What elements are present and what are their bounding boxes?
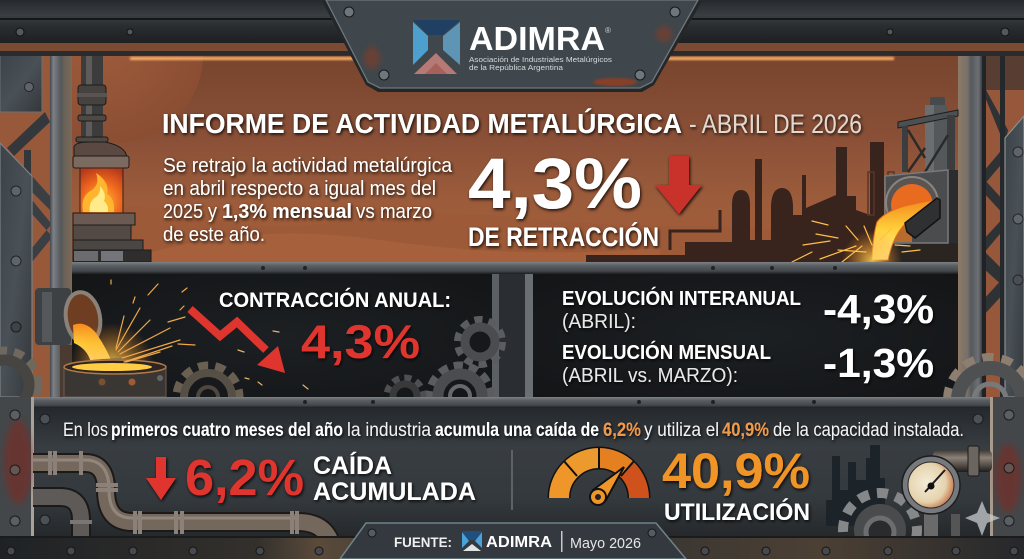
horizontal beam: middle top <box>72 262 958 274</box>
logo: ADIMRA emblem <box>413 20 460 74</box>
label: contraccion anual: 4,3% <box>301 315 420 368</box>
text: accumulated summary sentence: En los <box>63 420 108 441</box>
plate: header logo backing <box>322 0 702 92</box>
text: accumulated summary sentence: la industria <box>347 420 431 441</box>
desert dunes <box>72 206 958 262</box>
stat: 40,9% utilizacion <box>662 443 810 526</box>
gears: contraction panel <box>0 320 502 428</box>
text block: summary: 2025 y <box>163 201 217 223</box>
stat row: mensual <box>562 340 934 387</box>
big number: 4,3% retraction: 4,3% <box>468 145 642 224</box>
stat row: mensual: -1,3% <box>823 340 934 386</box>
glowing light strips <box>130 57 894 60</box>
panel: hero desert scene <box>0 0 1024 270</box>
text: accumulated summary sentence: 6,2% <box>603 420 641 441</box>
stat row: mensual: (ABRIL vs. MARZO): <box>562 365 738 387</box>
icon: pipe pouring molten metal <box>35 288 166 407</box>
planet <box>27 0 203 143</box>
logo: ADIMRA wordmark: ADIMRA <box>469 20 605 57</box>
title: - ABRIL DE 2026 <box>689 109 862 139</box>
text block: summary: en abril respecto a igual mes del <box>163 178 436 200</box>
text block: summary: vs marzo <box>356 201 432 223</box>
illustration: bottom factory silhouette <box>826 445 885 526</box>
stat row: interanual: (ABRIL): <box>562 311 636 333</box>
text block: summary: de este año. <box>163 224 265 246</box>
logo: ADIMRA wordmark: Asociación de Industriales Metalúrgicos <box>469 55 612 64</box>
icon: furnace with flame <box>73 52 151 262</box>
logo: ADIMRA wordmark: de la República Argentina <box>469 63 564 72</box>
frame: top bar <box>0 0 1024 56</box>
logo: ADIMRA wordmark: ® <box>605 26 611 35</box>
stat row: mensual: EVOLUCIÓN MENSUAL <box>562 340 771 364</box>
icon: falling trend arrow <box>190 309 285 373</box>
gear: right middle <box>948 358 1024 442</box>
stat: 6,2% caida acumulada: ACUMULADA <box>313 478 476 506</box>
illustration: factory silhouette <box>586 142 894 262</box>
text: accumulated summary sentence: acumula una caída de <box>435 420 599 441</box>
stat row: interanual: EVOLUCIÓN INTERANUAL <box>562 286 801 310</box>
frame: right column <box>958 50 1024 400</box>
panel: contraction <box>72 274 525 397</box>
footer source credit: Mayo 2026 <box>570 535 641 552</box>
stat: 40,9% utilizacion: 40,9% <box>662 443 810 499</box>
big number: 4,3% retraction: DE RETRACCIÓN <box>468 221 659 252</box>
text block: summary: 1,3% mensual <box>222 201 352 223</box>
icon: red arrow accumulated <box>146 457 176 500</box>
text: accumulated summary sentence: primeros cuatro meses del año <box>111 420 343 441</box>
footer source credit <box>394 531 641 552</box>
frame: left column <box>0 50 72 400</box>
footer plate <box>340 523 686 559</box>
illustration: gear and pressure dial <box>843 446 992 559</box>
footer source credit: ADIMRA <box>486 534 552 551</box>
text: accumulated summary sentence: 40,9% <box>722 420 769 441</box>
panel: accumulated bottom <box>33 408 992 538</box>
text: accumulated summary sentence <box>63 420 964 441</box>
stat row: interanual <box>562 286 934 333</box>
stat row: interanual: -4,3% <box>823 286 934 332</box>
label: contraccion anual: CONTRACCIÓN ANUAL: <box>219 288 451 312</box>
panel: evolution <box>525 274 958 397</box>
stat: 6,2% caida acumulada: CAÍDA <box>313 451 392 480</box>
logo: ADIMRA wordmark <box>469 20 612 72</box>
illustration: sparks burst <box>111 280 308 389</box>
title: INFORME DE ACTIVIDAD METALÚRGICA <box>162 108 682 139</box>
icon: sparkle star <box>965 501 1000 536</box>
desert foreground <box>120 234 660 262</box>
stat: 40,9% utilizacion: UTILIZACIÓN <box>664 498 810 526</box>
stat: 6,2% caida acumulada: 6,2% <box>185 449 304 506</box>
text block: summary <box>163 155 453 246</box>
icon: red down arrow <box>655 156 702 214</box>
illustration: copper pipes <box>33 451 330 540</box>
footer source credit: FUENTE: <box>394 534 452 550</box>
illustration: tower and ladle <box>842 97 958 290</box>
stat: 6,2% caida acumulada <box>185 449 476 506</box>
footer strip <box>0 536 1024 559</box>
label: contraccion anual <box>219 288 451 368</box>
icon: capacity gauge <box>559 447 639 505</box>
text: accumulated summary sentence: y utiliza el <box>644 420 719 441</box>
side plate: left rusty <box>0 397 34 542</box>
big number: 4,3% retraction <box>468 145 659 252</box>
text block: summary: Se retrajo la actividad metalúrgica <box>163 155 453 177</box>
illustration: sparks over desert <box>792 221 920 262</box>
text: accumulated summary sentence: de la capacidad instalada. <box>773 420 964 441</box>
horizontal beam: middle bottom <box>33 397 992 408</box>
side plate: right rusty <box>990 397 1024 542</box>
